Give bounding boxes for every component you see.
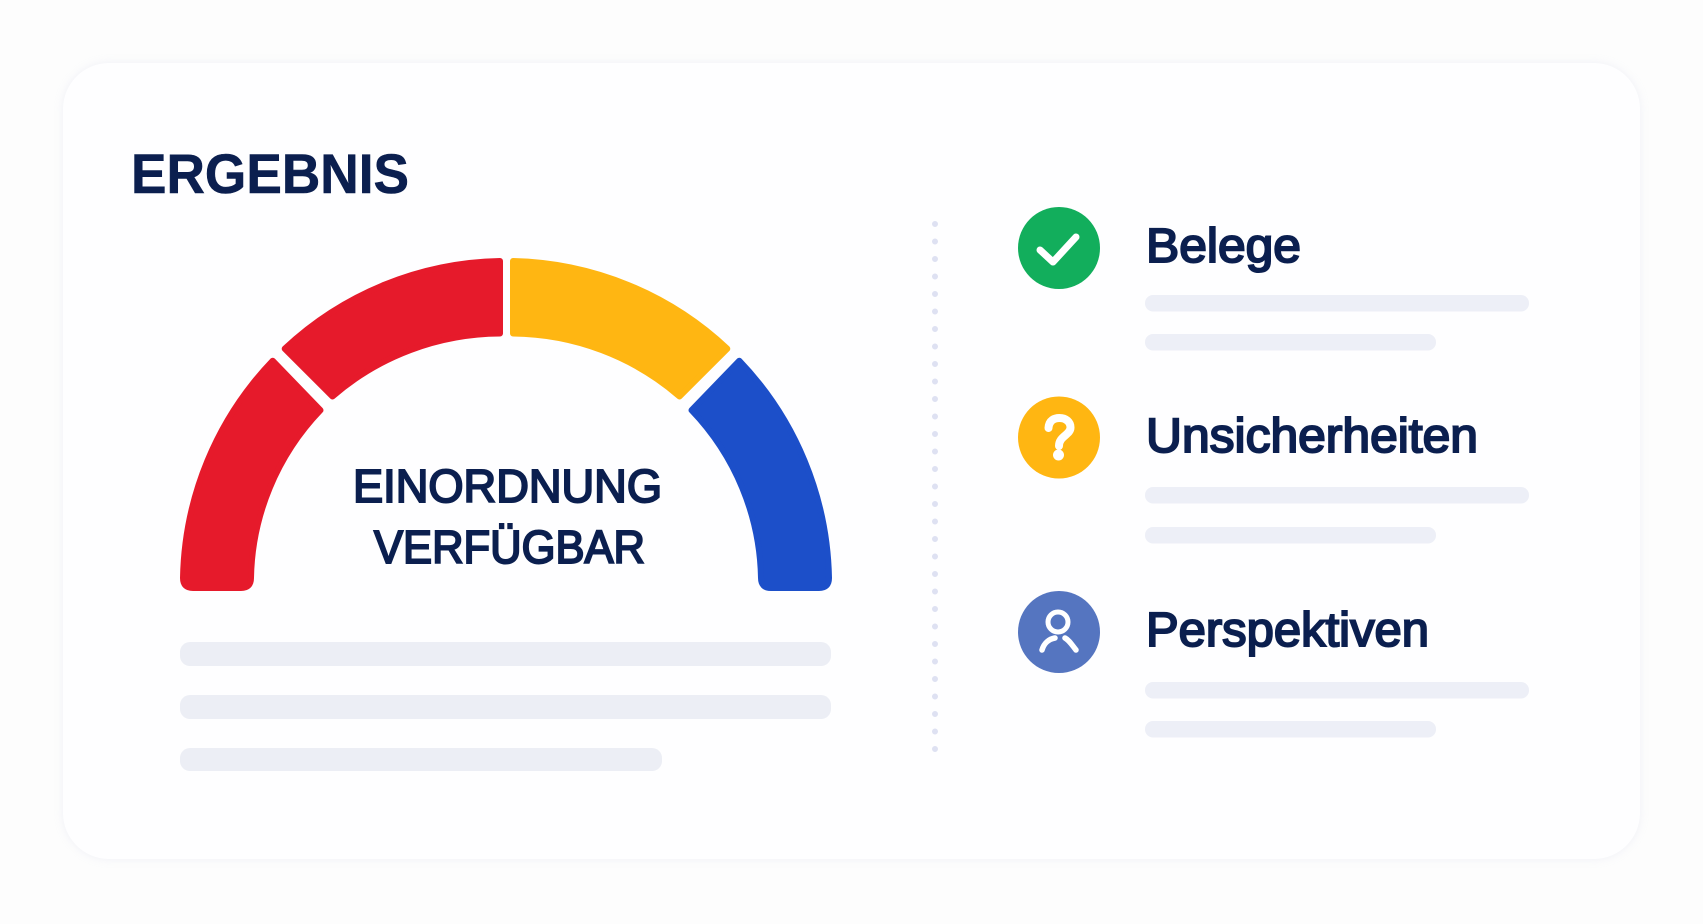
gauge segment: blue lower right bbox=[692, 361, 829, 588]
gauge segment: red lower left bbox=[183, 361, 320, 588]
item: Perspektiven bbox=[1018, 591, 1529, 738]
gauge label: VERFÜGBAR bbox=[374, 521, 645, 573]
placeholder lines: Belege bbox=[1145, 295, 1529, 350]
placeholder lines: Unsicherheiten bbox=[1145, 487, 1529, 544]
gauge label: EINORDNUNG bbox=[353, 460, 662, 512]
label: Belege: Belege bbox=[1146, 220, 1301, 273]
icon: yellow question mark bbox=[1018, 396, 1100, 478]
gauge chart bbox=[183, 261, 829, 588]
placeholder lines: Perspektiven bbox=[1145, 682, 1529, 738]
title: Ergebnis: ERGEBNIS bbox=[131, 142, 409, 205]
panel: result card bbox=[63, 63, 1640, 859]
label: Perspektiven: Perspektiven bbox=[1146, 604, 1429, 657]
gauge segment: red upper left bbox=[285, 261, 500, 396]
placeholder text lines: left bbox=[180, 642, 831, 771]
item: Belege bbox=[1018, 207, 1529, 350]
gauge segment: yellow upper right bbox=[513, 261, 727, 396]
icon: person bbox=[1018, 591, 1100, 673]
icon: green check bbox=[1018, 207, 1100, 289]
label: Unsicherheiten: Unsicherheiten bbox=[1146, 410, 1478, 463]
gauge label bbox=[353, 460, 662, 573]
item: Unsicherheiten bbox=[1018, 396, 1529, 544]
dotted divider bbox=[932, 224, 938, 750]
